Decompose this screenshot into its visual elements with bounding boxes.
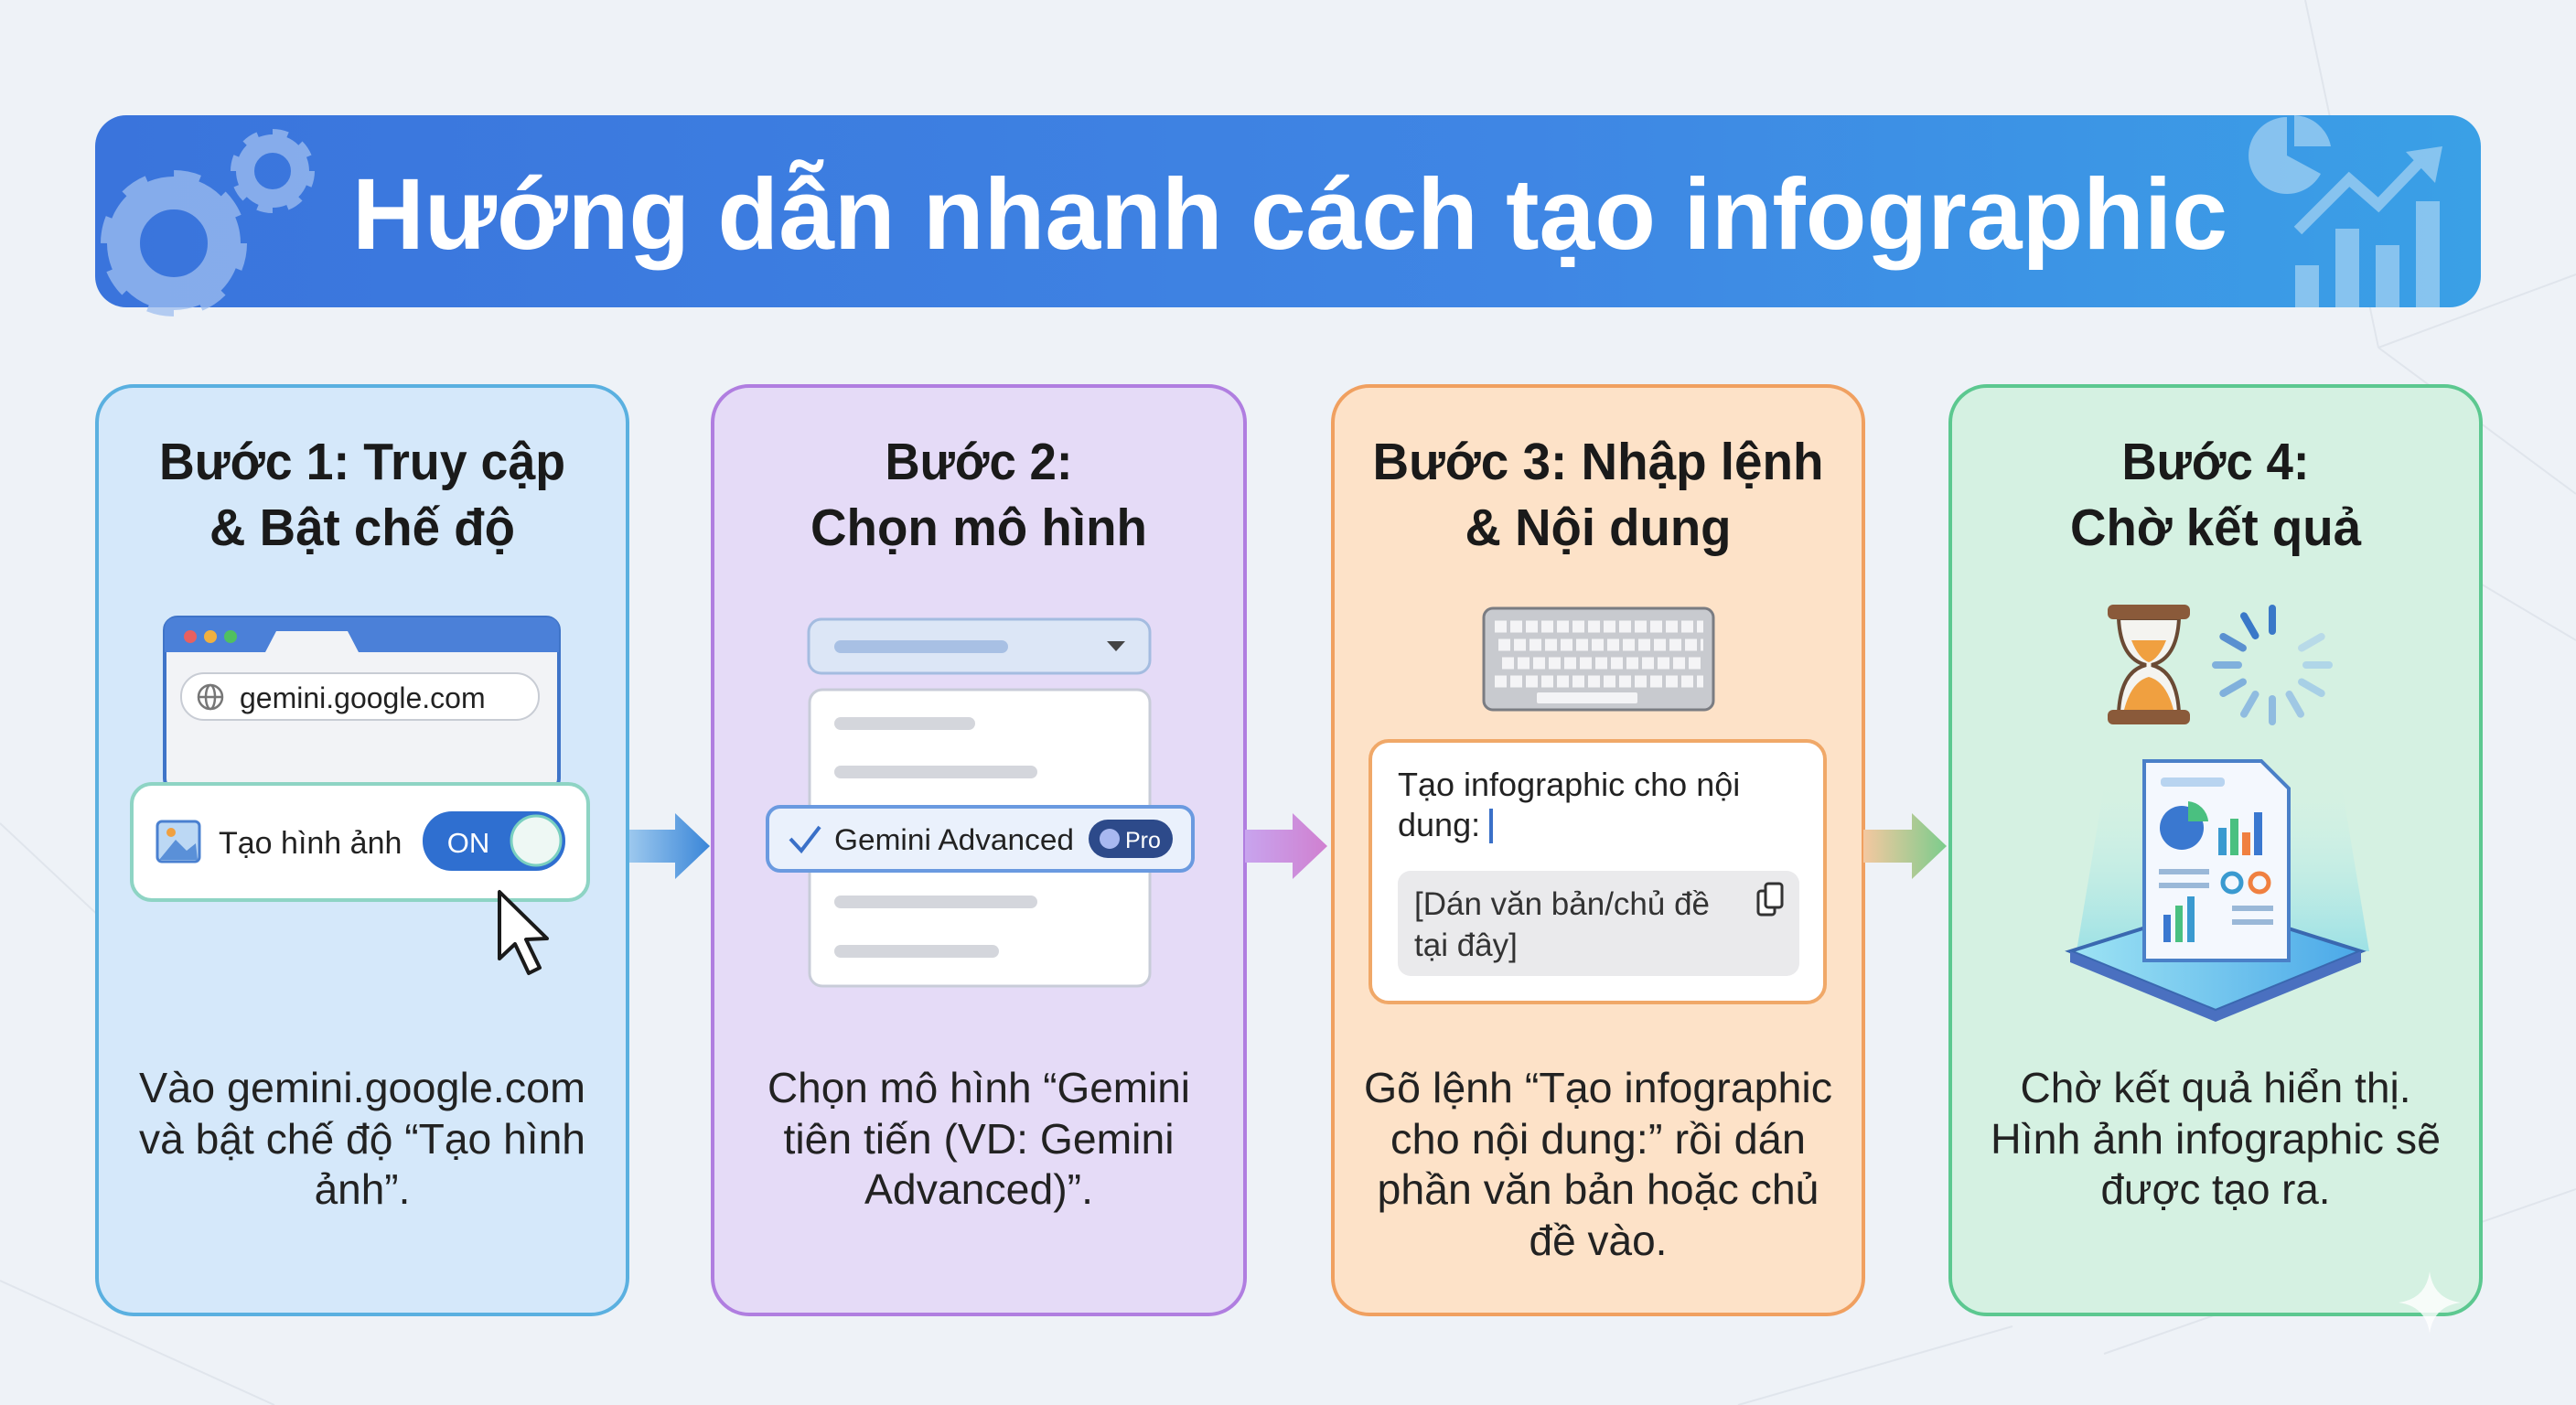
prompt card: [Dán văn bản/chủ đề: [1414, 886, 1710, 922]
body text step 1: và bật chế độ “Tạo hình: [139, 1115, 585, 1163]
body text step 4: [1991, 1064, 2441, 1213]
heading step 4: Chờ kết quả: [2070, 499, 2362, 557]
body text step 3: phần văn bản hoặc chủ: [1378, 1165, 1819, 1213]
body text step 3: Gõ lệnh “Tạo infographic: [1364, 1064, 1832, 1111]
panel: step 3: [1333, 386, 1863, 1314]
heading step 1: Bước 1: Truy cập: [159, 433, 565, 491]
body text step 2: Chọn mô hình “Gemini: [767, 1064, 1190, 1111]
prompt card: Tạo infographic cho nội: [1398, 766, 1740, 803]
panel: step 1: [97, 386, 628, 1314]
heading step 4: [2070, 433, 2362, 557]
panel: step 4: [1950, 386, 2481, 1314]
body text step 1: [139, 1064, 585, 1213]
body text step 4: Hình ảnh infographic sẽ: [1991, 1115, 2441, 1163]
list: [810, 690, 1150, 986]
arrow 2: [1245, 813, 1327, 879]
prompt card: dung:: [1398, 806, 1480, 843]
heading step 1: [159, 433, 565, 557]
selected item: Pro: [1125, 828, 1161, 853]
body text step 3: cho nội dung:” rồi dán: [1390, 1115, 1806, 1163]
body text step 2: Advanced)”.: [864, 1165, 1093, 1213]
heading step 3: & Nội dung: [1465, 499, 1731, 557]
icon: sparkle: [2399, 1271, 2461, 1334]
heading step 2: Bước 2:: [886, 433, 1072, 491]
prompt card: tại đây]: [1414, 928, 1518, 963]
icon: document on platform: [2070, 761, 2369, 1022]
heading step 2: Chọn mô hình: [810, 499, 1147, 557]
icon: keyboard: [1484, 608, 1713, 710]
heading step 1: & Bật chế độ: [209, 499, 515, 557]
selected item: [767, 807, 1193, 871]
body text step 2: [767, 1064, 1190, 1213]
body text step 3: đề vào.: [1530, 1217, 1667, 1264]
icon: gears: [112, 136, 307, 306]
arrow 3: [1863, 813, 1947, 879]
heading step 3: Bước 3: Nhập lệnh: [1372, 433, 1824, 491]
browser window: [165, 617, 559, 791]
body text step 4: được tạo ra.: [2100, 1165, 2331, 1213]
body text step 1: ảnh”.: [315, 1165, 410, 1213]
toggle card: Tạo hình ảnh: [219, 826, 402, 861]
icon: cursor: [499, 892, 547, 973]
arrow 1: [629, 813, 710, 879]
browser window: gemini.google.com: [240, 681, 486, 714]
icon: charts: [2249, 115, 2442, 307]
icon: spinner: [2216, 608, 2329, 722]
icon: hourglass: [2108, 605, 2190, 724]
header banner: [95, 115, 2481, 307]
title: Hướng dẫn nhanh cách tạo infographic: [352, 158, 2227, 271]
body text step 2: tiên tiến (VD: Gemini: [783, 1115, 1175, 1163]
body text step 1: Vào gemini.google.com: [139, 1064, 585, 1111]
body text step 4: Chờ kết quả hiển thị.: [2020, 1064, 2411, 1111]
heading step 2: [810, 433, 1147, 557]
panel: step 2: [713, 386, 1245, 1314]
heading step 3: [1372, 433, 1824, 557]
selected item: Gemini Advanced: [834, 823, 1074, 856]
dropdown: [809, 619, 1150, 673]
toggle card: ON: [447, 827, 489, 859]
body text step 3: [1364, 1064, 1832, 1264]
prompt card: [1370, 741, 1825, 1003]
toggle card: [132, 784, 588, 900]
heading step 4: Bước 4:: [2122, 433, 2309, 491]
